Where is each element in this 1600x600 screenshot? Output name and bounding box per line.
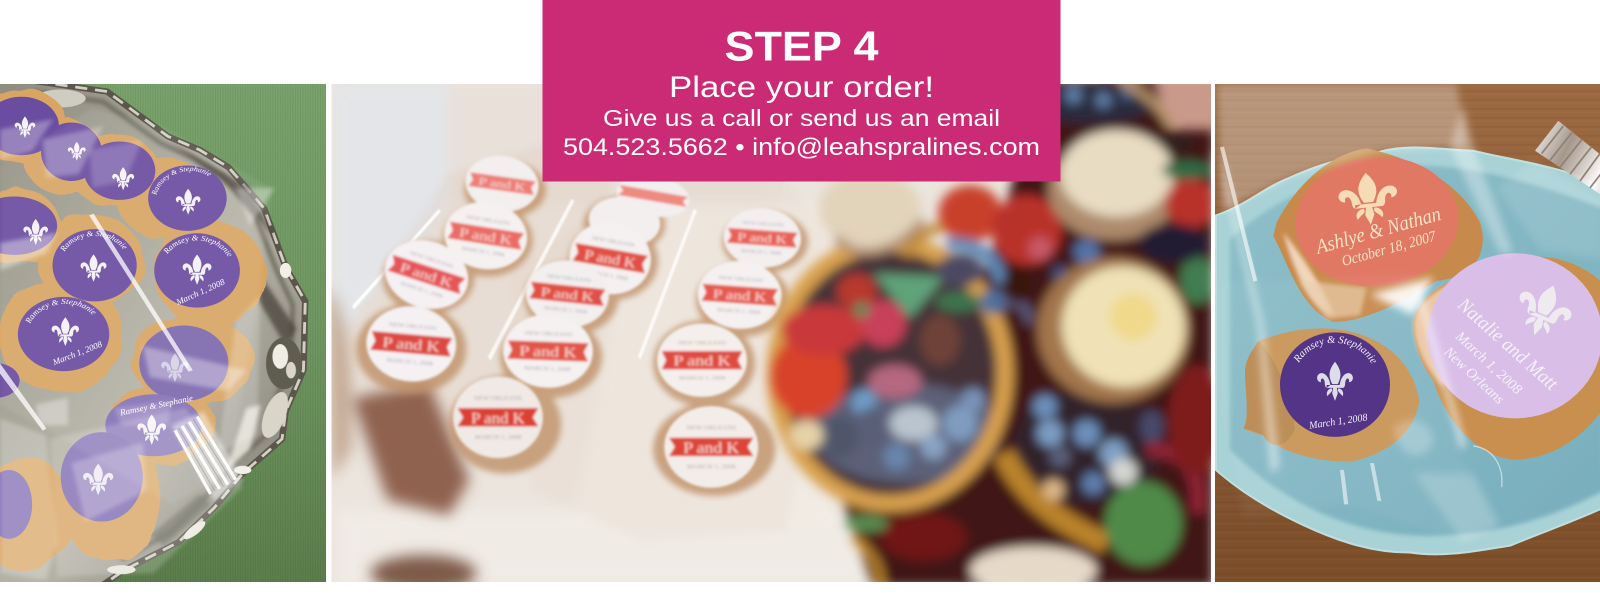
coral sticker names: Ashlye & Nathan <box>1312 203 1443 259</box>
P and K stickers: NEW ORLEANS <box>678 341 727 346</box>
P and K stickers: NEW ORLEANS <box>742 220 784 228</box>
lilac sticker text: New Orleans <box>1440 343 1507 408</box>
P and K stickers: P and K <box>673 352 731 369</box>
praline cookies <box>0 88 266 573</box>
P and K stickers: P and K <box>683 439 739 457</box>
sticker inscriptions: March 1, 2008 <box>174 276 227 307</box>
heading: step number: STEP 4 <box>724 22 879 70</box>
crimped wrapper end <box>171 411 243 501</box>
photo: silver tray of praline cookies with purple stickers <box>0 84 326 582</box>
lilac sticker fleur-de-lis <box>1520 286 1572 336</box>
blurred salmon wall behind the tarts <box>1100 84 1211 152</box>
P and K stickers: P and K <box>471 411 525 427</box>
P and K stickers: P and K <box>737 230 787 247</box>
P and K stickers: MARCH 1, 2008 <box>461 246 505 258</box>
P and K stickers: MARCH 1, 2008 <box>400 281 443 300</box>
purple sticker text: March 1, 2008 <box>1308 412 1368 432</box>
lilac sticker text: Natalie and Matt <box>1453 293 1562 395</box>
photo: cookies with red P and K stickers and blurred fruit tarts <box>327 80 1225 593</box>
P and K stickers: MARCH 1, 2008 <box>741 249 782 257</box>
P and K stickers: MARCH 1, 2008 <box>475 434 521 441</box>
P and K stickers: NEW ORLEANS <box>466 215 510 227</box>
photo: pralines with colored stickers on a blue plate <box>1215 84 1600 582</box>
P and K stickers: P and K <box>712 287 767 305</box>
cellophane glints <box>1220 147 1502 504</box>
P and K stickers: MARCH 1, 2008 <box>717 308 761 316</box>
purple sticker text <box>1294 336 1376 429</box>
P and K stickers: P and K <box>398 260 454 291</box>
P and K stickers: NEW ORLEANS <box>718 275 763 284</box>
P and K stickers: MARCH 1, 2008 <box>524 366 571 373</box>
P and K stickers: NEW ORLEANS <box>389 321 437 332</box>
coral sticker date: October 18, 2007 <box>1340 228 1438 270</box>
P and K stickers: NEW ORLEANS <box>525 331 573 338</box>
text: phone and email: 504.523.5662 • info@leahspralines.com <box>563 134 1040 161</box>
P and K stickers: P and K <box>458 226 513 248</box>
cellophane bags <box>1217 84 1600 542</box>
praline cookies under stickers <box>356 161 808 496</box>
P and K stickers: P and K <box>519 342 577 361</box>
P and K stickers: P and K <box>478 174 527 194</box>
text: call to action: Give us a call or send us an email <box>603 105 1000 131</box>
P and K stickers: MARCH 1, 2008 <box>679 376 725 381</box>
blurred chocolate pralines <box>352 383 477 592</box>
silver tray <box>0 81 305 587</box>
P and K stickers: NEW ORLEANS <box>547 274 591 284</box>
blurred backdrop shapes <box>332 90 442 480</box>
plastic wrap highlights <box>0 109 275 580</box>
blurred fruit tarts <box>770 80 1225 593</box>
coral sticker fleur-de-lis <box>1338 173 1397 224</box>
bottom-left praline with purple sticker <box>1243 328 1420 462</box>
fleur-de-lis marks <box>15 116 211 495</box>
P and K stickers: MARCH 1, 2008 <box>687 464 736 470</box>
lilac sticker text: March 1, 2008 <box>1452 328 1525 398</box>
scalloped blue plate <box>1216 147 1600 554</box>
P and K stickers: NEW ORLEANS <box>686 425 737 431</box>
P and K stickers: P and K <box>382 333 440 356</box>
pale table background <box>331 84 1211 582</box>
sticker inscriptions: Ramsey & Stephanie <box>60 231 126 252</box>
crimped bag seal <box>1535 121 1600 196</box>
bag edge glints <box>352 199 697 360</box>
wood table <box>1213 81 1600 587</box>
pink step banner <box>542 0 1060 182</box>
top praline with coral sticker <box>1273 148 1483 322</box>
sticker inscriptions: Ramsey & Stephanie <box>118 393 194 418</box>
subheading: place your order: Place your order! <box>669 71 934 104</box>
purple sticker text: Ramsey & Stephanie <box>1294 336 1376 364</box>
sticker inscriptions: March 1, 2008 <box>50 339 104 367</box>
right praline with lilac sticker <box>1413 253 1600 460</box>
P and K stickers: P and K <box>540 286 594 305</box>
purple stickers <box>0 97 240 539</box>
sticker inscriptions: Ramsey & Stephanie <box>152 166 211 195</box>
P and K stickers: MARCH 1, 2008 <box>586 269 628 282</box>
P and K stickers: P and K <box>583 247 637 272</box>
green woven background <box>76 84 326 582</box>
clear cellophane bags <box>352 149 608 412</box>
P and K stickers: NEW ORLEANS <box>409 251 454 270</box>
plastic wrap creases <box>0 214 193 431</box>
P and K stickers <box>363 151 803 488</box>
P and K stickers: NEW ORLEANS <box>591 236 635 249</box>
sticker inscriptions: Ramsey & Stephanie <box>164 235 232 256</box>
sticker inscriptions <box>0 115 268 458</box>
P and K stickers: MARCH 1, 2008 <box>386 357 433 367</box>
P and K stickers: NEW ORLEANS <box>474 395 522 402</box>
sticker inscriptions: Ramsey & Stephanie <box>25 298 96 324</box>
P and K stickers: MARCH 1, 2008 <box>544 306 588 315</box>
purple sticker fleur-de-lis <box>1317 362 1353 401</box>
